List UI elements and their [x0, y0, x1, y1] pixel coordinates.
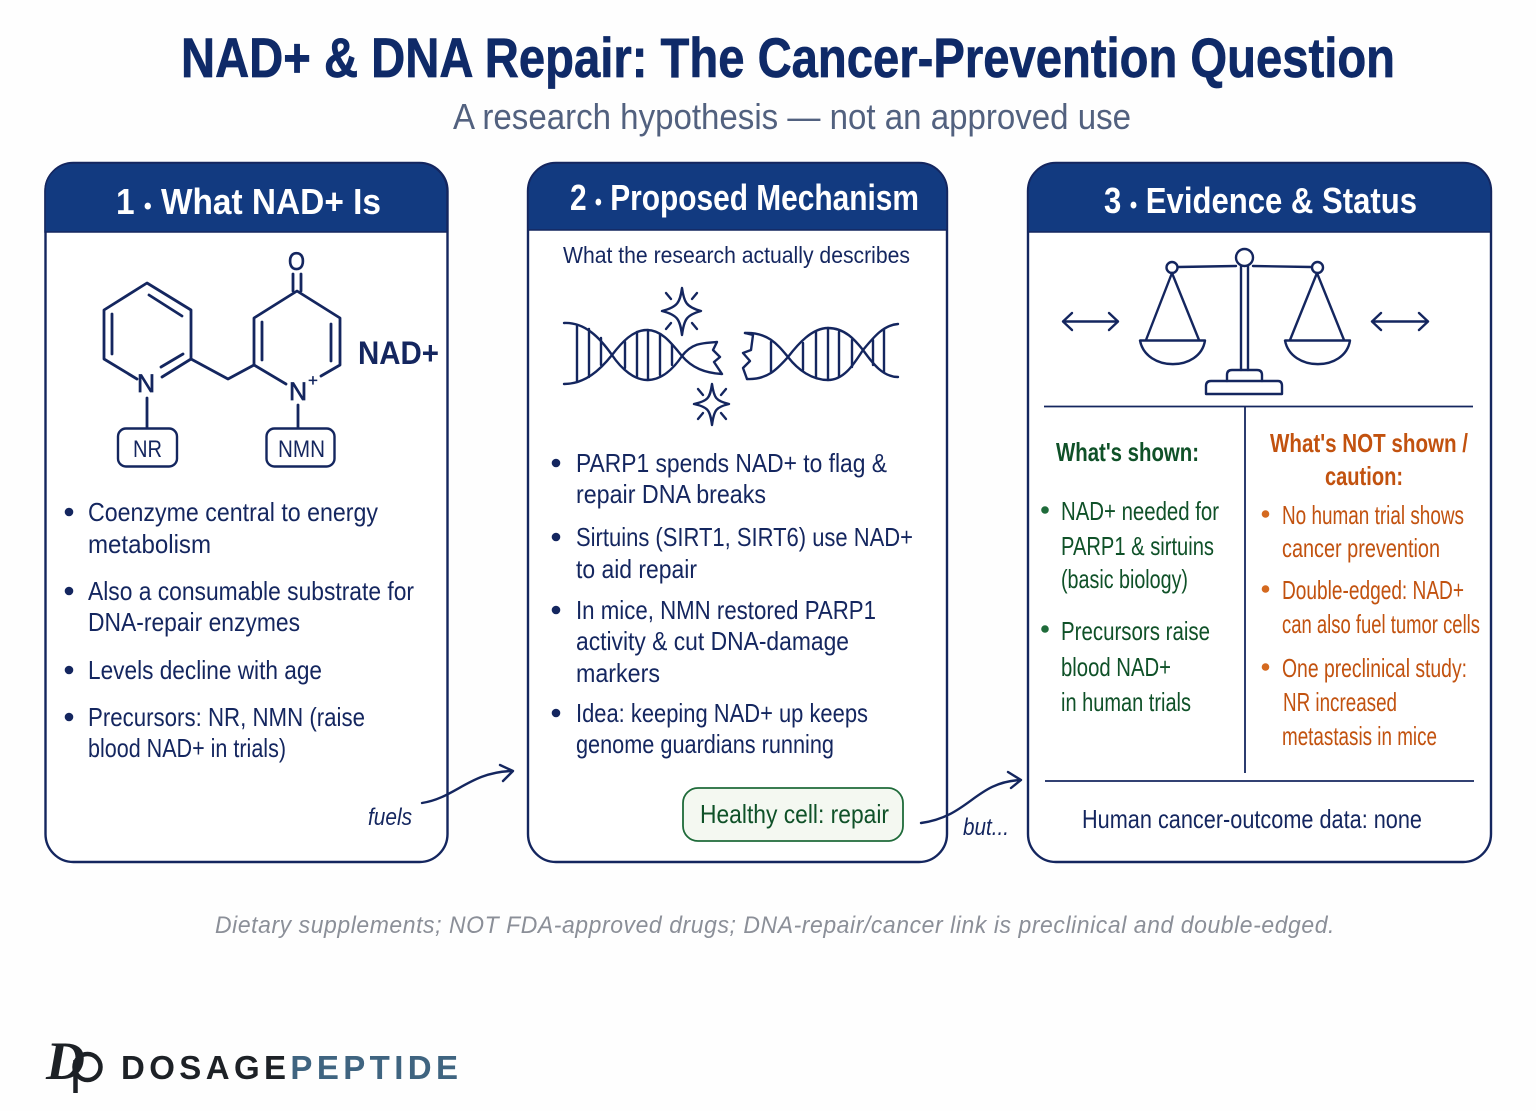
panel 2 bullet list: to aid repair: [576, 554, 697, 584]
icon: left double arrow: [1063, 313, 1118, 330]
panel: evidence and status: [1028, 163, 1491, 862]
logo mark: [45, 1031, 100, 1093]
panel 1 bullet list: Levels decline with age: [88, 655, 322, 685]
panel 1 header: [45, 163, 447, 232]
callout: healthy cell: Healthy cell: repair: [700, 799, 889, 829]
column: what's not shown: No human trial shows: [1282, 500, 1464, 530]
arrow: fuels to mechanism: [422, 765, 513, 803]
column: what's shown: What's shown:: [1056, 437, 1199, 467]
column: what's shown: in human trials: [1061, 687, 1191, 717]
logo wordmark: DOSAGEPEPTIDE: [121, 1049, 458, 1086]
icon: NAD+ molecule diagram: +: [308, 371, 318, 390]
comparison table dividers: [1044, 406, 1474, 781]
label: NMN: [266, 428, 334, 466]
panel 1 bullet list: [65, 497, 414, 763]
icon: broken DNA helix with sparks: [564, 288, 898, 425]
panel: what NAD+ is: [45, 163, 448, 862]
panel 2 bullet list: repair DNA breaks: [576, 479, 766, 509]
label: NMN: NMN: [278, 436, 325, 463]
panel 1 bullet list: blood NAD+ in trials): [88, 733, 286, 763]
panel 1 bullet list: Precursors: NR, NMN (raise: [88, 702, 365, 732]
panel 2 bullet list: Sirtuins (SIRT1, SIRT6) use NAD+: [576, 522, 913, 552]
icon: balance scale: [1063, 249, 1428, 394]
icon: NAD+ molecule diagram: [104, 248, 439, 466]
column: what's not shown: metastasis in mice: [1282, 721, 1437, 751]
label: NR: [118, 428, 177, 466]
column: what's shown: Precursors raise: [1061, 616, 1210, 646]
column: what's shown: (basic biology): [1061, 564, 1188, 594]
panel 3 heading: 3 • Evidence & Status: [1104, 180, 1417, 221]
logo mark: D: [45, 1031, 85, 1091]
panel 3 header: [1028, 163, 1491, 232]
panel 1 bullet list: metabolism: [88, 529, 211, 559]
panel 2 bullet list: Idea: keeping NAD+ up keeps: [576, 698, 868, 728]
panel 2 subheading: What the research actually describes: [563, 242, 910, 268]
column: what's not shown: [1262, 428, 1480, 751]
column: what's not shown: cancer prevention: [1282, 533, 1440, 563]
panel 2 bullet list: markers: [576, 658, 660, 688]
arrow label: fuels: fuels: [368, 804, 412, 831]
subtitle: A research hypothesis — not an approved use: [453, 96, 1131, 137]
icon: NAD+ molecule diagram: O: [288, 248, 305, 276]
panel 1 bullet list: DNA-repair enzymes: [88, 607, 300, 637]
panel: proposed mechanism: [528, 163, 1009, 862]
panel 2 bullet list: PARP1 spends NAD+ to flag &: [576, 448, 887, 478]
column: what's shown: NAD+ needed for: [1061, 496, 1219, 526]
column: what's not shown: What's NOT shown /: [1270, 428, 1468, 458]
column: what's shown: blood NAD+: [1061, 652, 1171, 682]
column: what's shown: PARP1 & sirtuins: [1061, 531, 1214, 561]
panel 1 heading: 1 • What NAD+ Is: [116, 181, 381, 222]
status line: Human cancer-outcome data: none: [1082, 804, 1422, 834]
panel 2 header: [528, 163, 947, 230]
column: what's not shown: caution:: [1325, 461, 1403, 491]
icon: NAD+ molecule diagram: N: [137, 370, 155, 398]
label: NR: NR: [133, 436, 162, 463]
panel 2 bullet list: genome guardians running: [576, 729, 834, 759]
panel 2 bullet list: In mice, NMN restored PARP1: [576, 595, 876, 625]
label: NAD+: NAD+: [358, 335, 439, 371]
logo: [45, 1031, 458, 1093]
panel 1 bullet list: Coenzyme central to energy: [88, 497, 378, 527]
panel 1 bullet list: Also a consumable substrate for: [88, 576, 414, 606]
arrow label: but: but...: [963, 814, 1009, 841]
arrow: repair to evidence: [921, 772, 1021, 823]
icon: NAD+ molecule diagram: N: [289, 378, 307, 406]
footnote: Dietary supplements; NOT FDA-approved drugs; DNA-repair/cancer link is preclinical and double-edged.: [215, 912, 1335, 939]
column: what's not shown: One preclinical study:: [1282, 653, 1467, 683]
icon: right double arrow: [1372, 313, 1428, 330]
column: what's not shown: NR increased: [1283, 687, 1397, 717]
callout: healthy cell: [683, 788, 903, 841]
panel 2 heading: 2 • Proposed Mechanism: [570, 177, 919, 218]
column: what's shown: [1041, 437, 1219, 717]
panel 2 bullet list: [552, 448, 913, 759]
column: what's not shown: Double-edged: NAD+: [1282, 575, 1464, 605]
panel 2 bullet list: activity & cut DNA-damage: [576, 626, 849, 656]
